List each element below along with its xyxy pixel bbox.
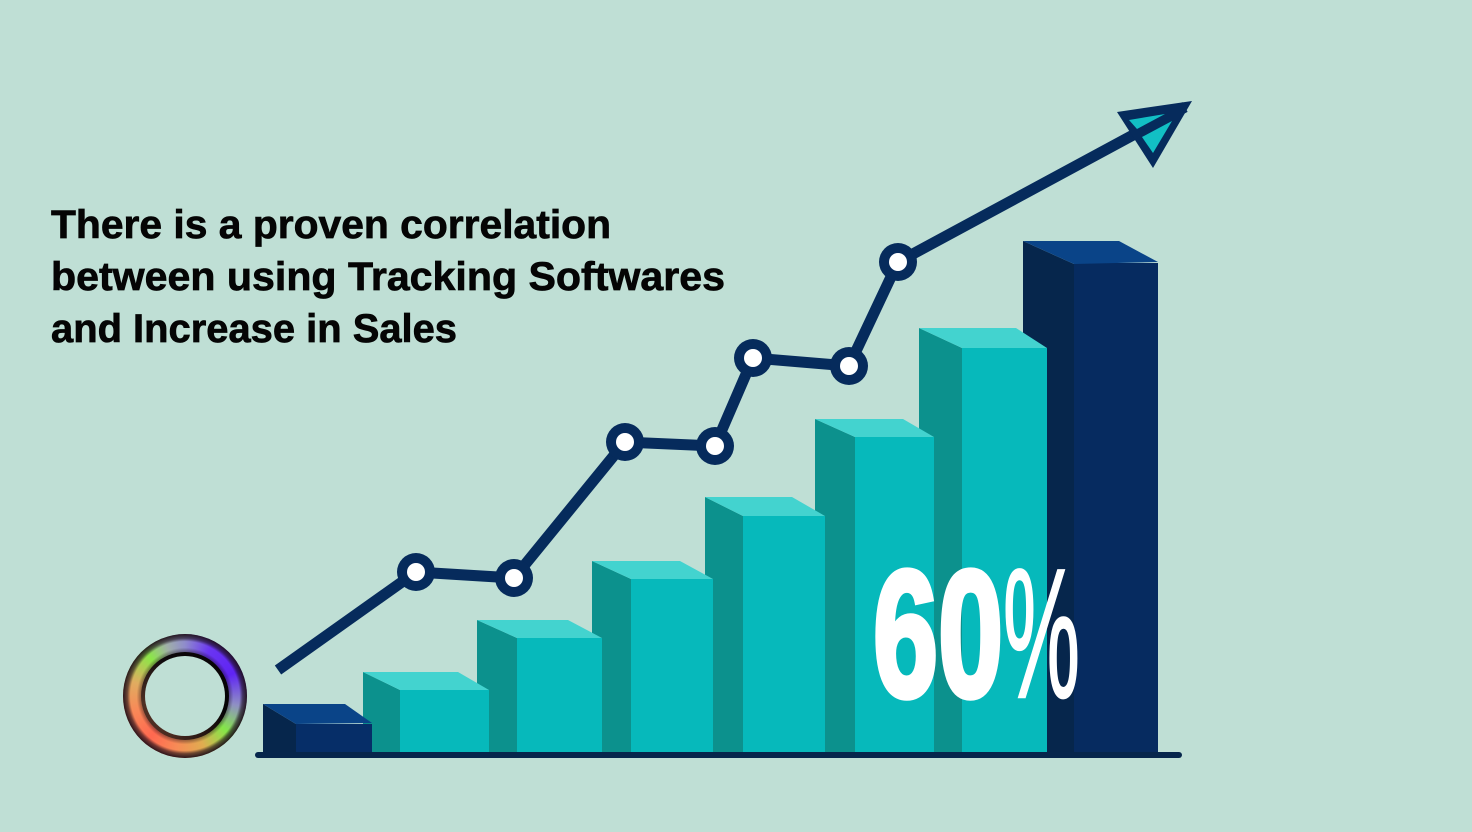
- baseline axis: [255, 752, 1182, 758]
- heading: There is a proven correlation: [51, 203, 611, 247]
- trend line: [278, 107, 1185, 670]
- bar 5: [705, 497, 825, 752]
- 60% figure: [873, 532, 1080, 737]
- icon: rainbow ring logo: [123, 634, 247, 758]
- heading: [51, 203, 725, 351]
- bar 2: [363, 672, 489, 752]
- arrow head: [1117, 101, 1192, 168]
- bar 8: [1023, 241, 1158, 752]
- line markers: [397, 243, 917, 597]
- heading: between using Tracking Softwares: [51, 255, 725, 299]
- bar 6: [815, 419, 934, 752]
- bar 1: [263, 704, 372, 752]
- 60% figure: 60: [873, 535, 1003, 735]
- heading: and Increase in Sales: [51, 307, 457, 351]
- bar 4: [592, 561, 713, 752]
- 60% figure: %: [1003, 532, 1080, 737]
- bar 3: [477, 620, 602, 752]
- bar 7: [919, 328, 1047, 752]
